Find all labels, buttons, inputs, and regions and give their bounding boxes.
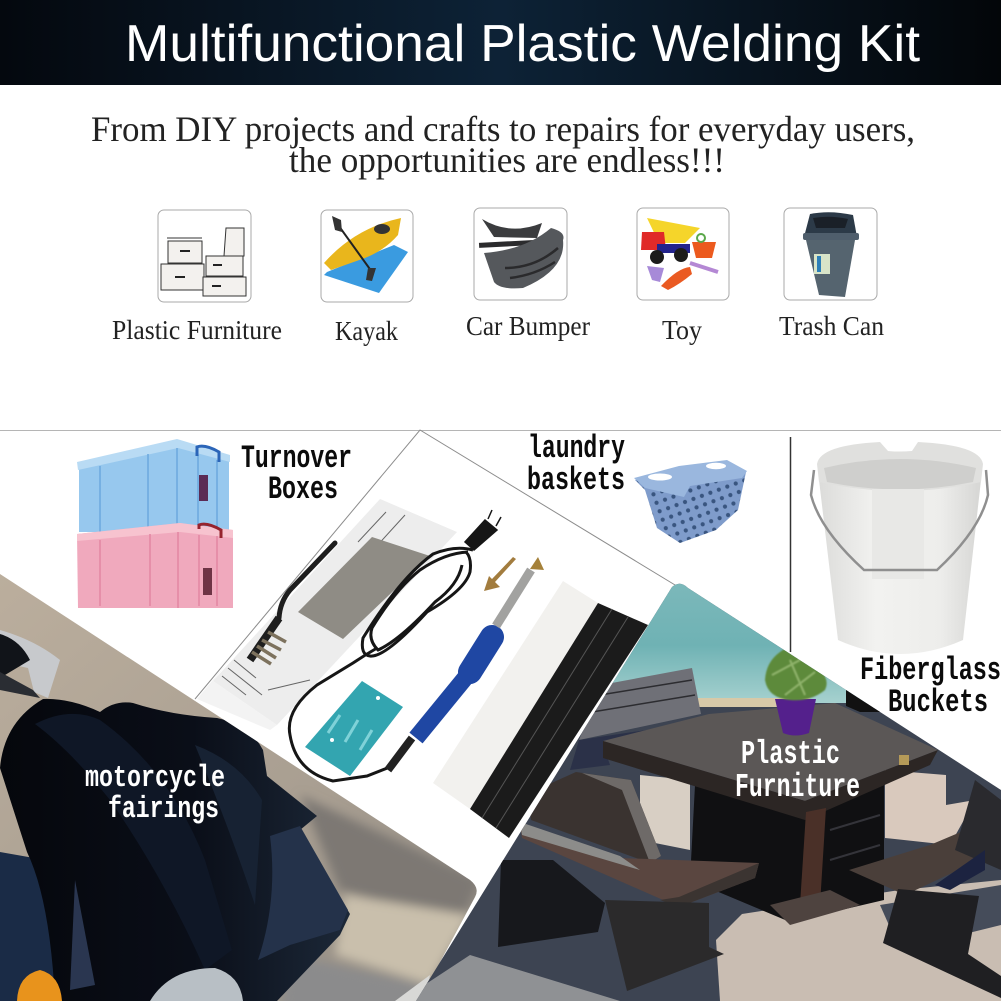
bench seat: [521, 826, 759, 900]
label: motorcycle fairings: [85, 761, 225, 827]
subtitle: From DIY projects and crafts to repairs for everyday users,: [91, 109, 915, 149]
front left bench: [498, 772, 759, 991]
label: laundry baskets: laundry: [528, 430, 625, 467]
sea: [600, 584, 866, 703]
table: [603, 703, 938, 925]
label: turnover boxes: Turnover: [241, 440, 352, 477]
icon: trash can: [784, 208, 877, 300]
front right bench: [849, 780, 1001, 998]
label: plastic furniture: Furniture: [735, 769, 860, 806]
label: laundry baskets: baskets: [527, 462, 625, 499]
left navy machinery: [0, 852, 54, 1001]
panel: furniture photo: [400, 570, 1001, 1001]
icon: toy: [637, 208, 729, 300]
black plastic rods: [470, 603, 648, 838]
title banner: [0, 0, 1001, 85]
label: turnover boxes: Boxes: [268, 471, 338, 508]
cleaning plate: [305, 681, 403, 776]
divider: [790, 437, 792, 652]
label: motorcycle fairings: fairings: [108, 792, 219, 827]
labels: Plastic Furniture: [112, 315, 282, 345]
title: Multifunctional Plastic Welding Kit: [125, 15, 921, 73]
light gaps behind table: [640, 775, 690, 850]
plug: [465, 510, 501, 550]
label: laundry baskets: [527, 430, 625, 499]
tiles: [716, 880, 1001, 1001]
icon: plastic furniture storage boxes: [158, 210, 251, 302]
section rule and diagonal frames: [0, 430, 1001, 432]
ground: [410, 570, 1001, 1001]
panel: motorcycle photo: [0, 570, 480, 1001]
power cord: [289, 548, 473, 781]
bench backrest: [527, 772, 661, 863]
laundry basket: [634, 460, 747, 543]
motorcycle fairing: [0, 699, 350, 1001]
label: fiberglass buckets: [860, 652, 1001, 721]
dark wedge behind table: [846, 690, 880, 712]
turnover boxes: [77, 439, 233, 608]
plant: [765, 648, 827, 700]
road strips: [280, 795, 480, 1001]
label: turnover boxes: [241, 440, 352, 508]
icon: mirror: [0, 630, 60, 698]
subtitle: the opportunities are endless!!!: [289, 140, 725, 180]
icon: kayak: [321, 210, 413, 302]
manual: [213, 499, 457, 725]
white plastic rods: [433, 581, 598, 809]
diagonal panel outline: [195, 430, 680, 699]
labels: Toy: [662, 315, 702, 345]
labels: Car Bumper: [466, 311, 590, 341]
subtitle: [91, 109, 915, 180]
spare tip: [484, 557, 516, 591]
bench legs: [605, 900, 724, 991]
road white strip: [395, 975, 430, 1001]
label: motorcycle fairings: motorcycle: [85, 761, 225, 796]
mesh sheet: [298, 537, 430, 639]
label: plastic furniture: [735, 736, 860, 806]
plant pot: [775, 699, 816, 736]
labels: [112, 311, 884, 346]
motorcycle indicator: [17, 970, 62, 1001]
panel: application icons: [112, 208, 884, 346]
fiberglass bucket: [811, 442, 988, 654]
wire brush: [250, 543, 335, 664]
label: plastic furniture: Plastic: [741, 736, 840, 773]
labels: Kayak: [335, 316, 398, 346]
icon: car bumper: [474, 208, 567, 300]
welding kit contents: [197, 499, 648, 838]
back bench: [579, 668, 701, 740]
labels: Trash Can: [779, 311, 884, 341]
welding iron: [388, 557, 544, 770]
motorcycle headlight: [150, 968, 243, 1001]
